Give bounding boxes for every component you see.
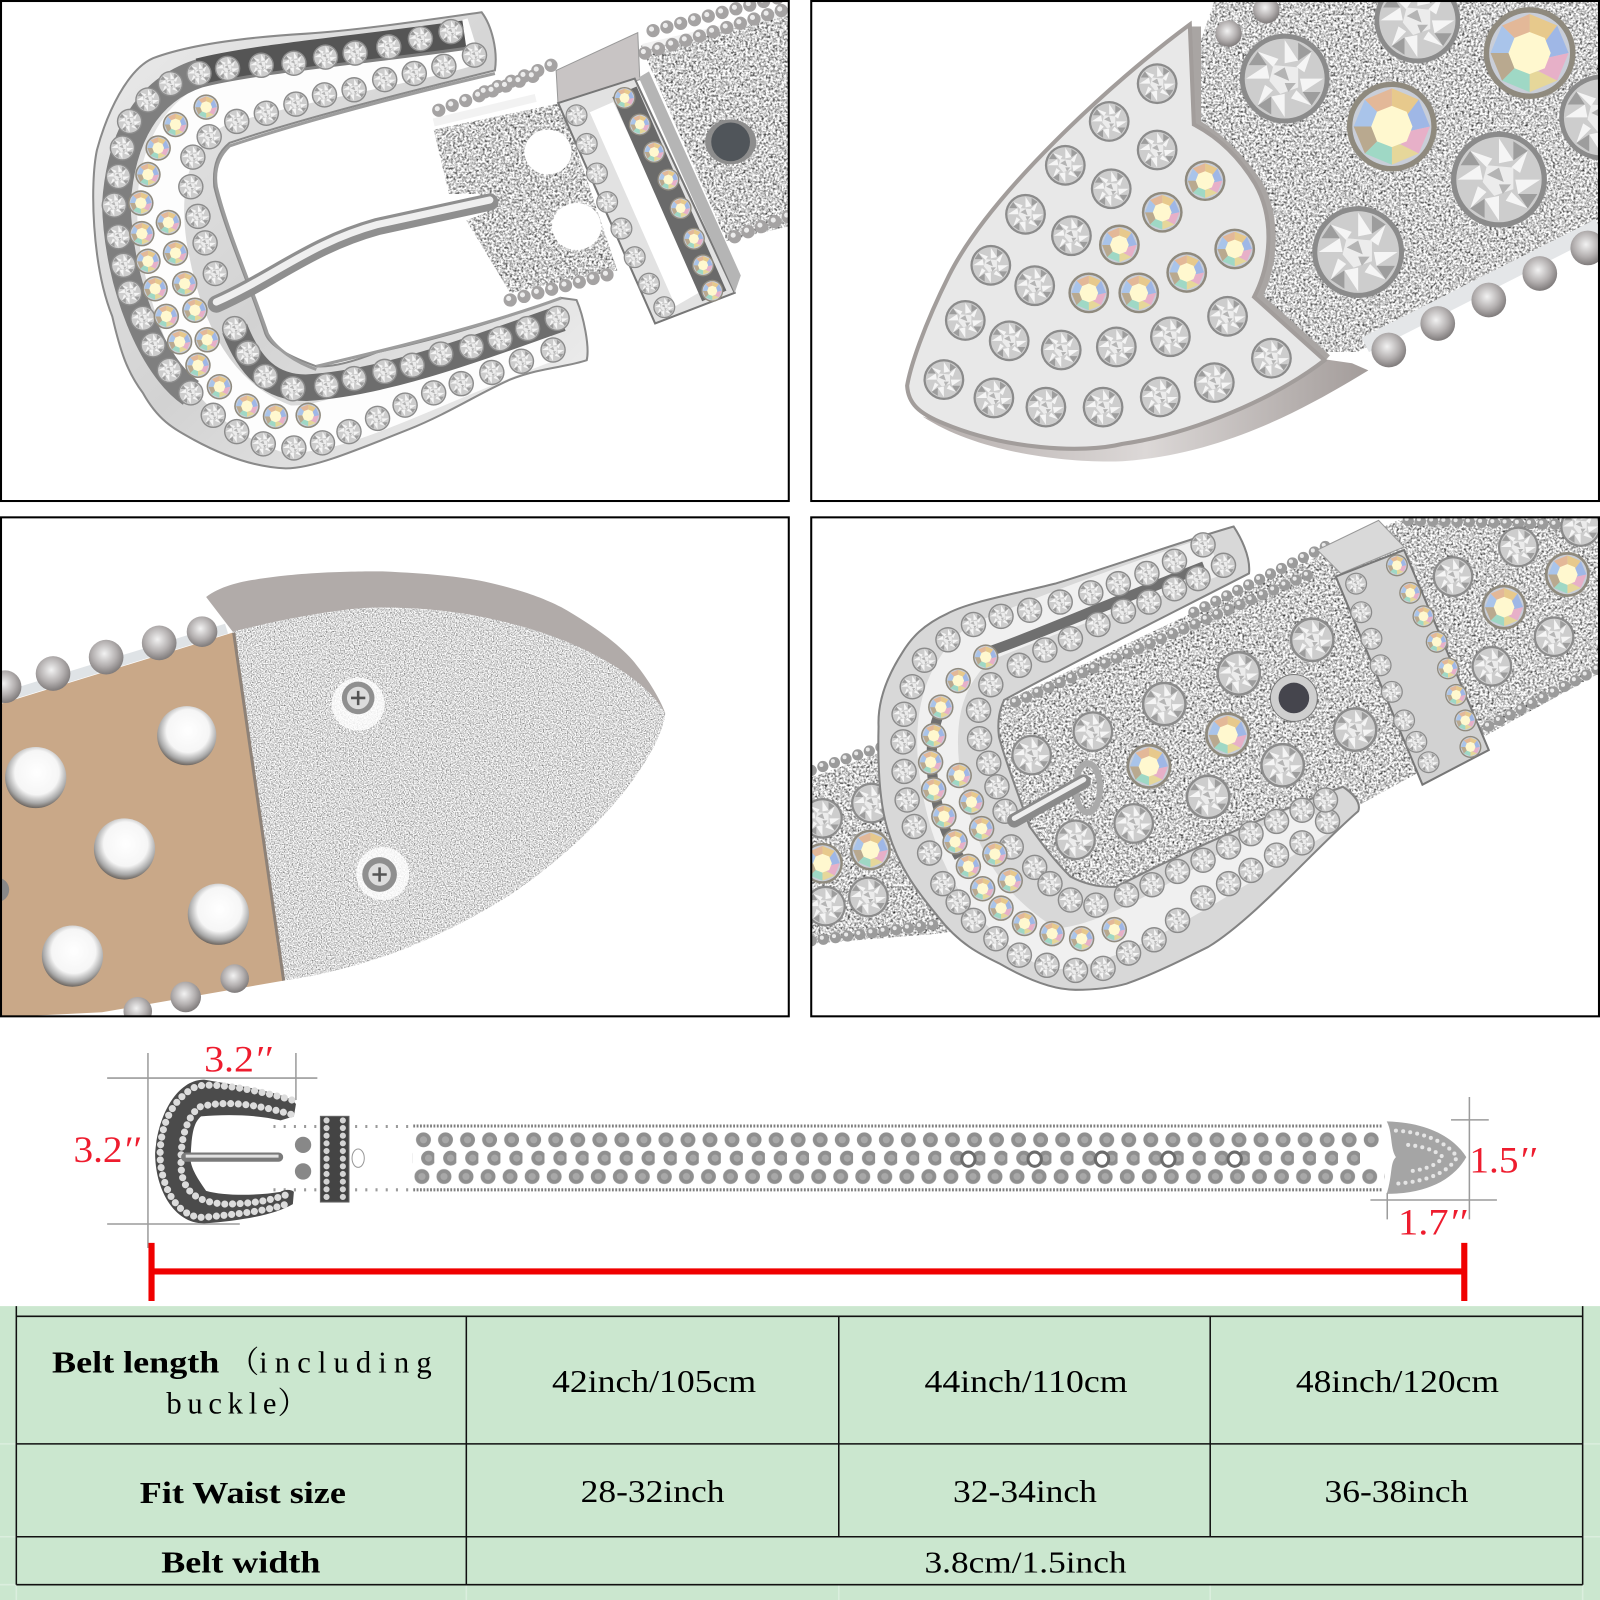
size table xyxy=(0,1306,1600,1600)
row header: belt length: （ xyxy=(229,1345,259,1379)
rhinestones: clear rows xyxy=(102,19,570,461)
strap edge beads xyxy=(1215,0,1600,367)
panel: belt tip back xyxy=(0,571,665,1026)
mini buckle xyxy=(155,1080,311,1223)
panel: belt tip front xyxy=(907,0,1600,461)
screw halos xyxy=(332,678,409,900)
row: waist values: 32-34inch xyxy=(953,1474,1097,1509)
buckle inner polished band xyxy=(161,41,551,429)
panel frames xyxy=(1,1,1599,1016)
large strap stones xyxy=(1240,0,1600,298)
leather white edge xyxy=(0,629,227,698)
snap stud xyxy=(1270,674,1317,721)
row: belt length values: 48inch/120cm xyxy=(1296,1364,1499,1399)
row: belt length values: 44inch/110cm xyxy=(924,1364,1128,1399)
panel: buckled belt xyxy=(802,506,1600,990)
row header: belt length: Belt length xyxy=(52,1345,219,1379)
row header: belt length: including xyxy=(259,1345,432,1379)
tip face xyxy=(907,24,1324,449)
tip rhinestones xyxy=(923,63,1292,428)
dimension guide lines xyxy=(107,1053,1497,1248)
dimension label: buckle width: 3.2′′ xyxy=(204,1038,272,1079)
edge beads xyxy=(0,616,249,1026)
panel: buckle close-up xyxy=(93,0,789,468)
buckle frame xyxy=(93,12,588,468)
belt size diagram xyxy=(73,1038,1537,1301)
rhinestones: iridescent rows xyxy=(128,94,321,429)
row: belt width value: 3.8cm/1.5inch xyxy=(924,1545,1127,1579)
buckle frame xyxy=(878,527,1359,990)
bead chains xyxy=(810,519,1599,941)
rivets xyxy=(0,706,249,987)
mini belt adjustment holes xyxy=(962,1152,1241,1166)
mini keeper xyxy=(320,1116,364,1202)
tip rim against strap xyxy=(1196,27,1327,359)
bead chains xyxy=(437,0,789,300)
row: waist values: 28-32inch xyxy=(581,1474,725,1509)
buckle window rim xyxy=(216,73,561,369)
keeper loop xyxy=(1317,520,1489,785)
tip left edge xyxy=(234,633,284,981)
buckle clear rhinestone rows xyxy=(890,532,1340,983)
strap stones xyxy=(802,506,1600,927)
belt glitter sections xyxy=(434,8,789,293)
dimension label: tip width: 1.7′′ xyxy=(1398,1202,1467,1243)
row: belt length values xyxy=(552,1364,1499,1399)
row header: belt length: buckle xyxy=(166,1386,277,1420)
row: waist values: 36-38inch xyxy=(1324,1474,1469,1509)
buckle prong xyxy=(1014,763,1100,820)
tan leather back xyxy=(0,633,284,1017)
row header: belt length: ） xyxy=(278,1386,308,1420)
mini belt body xyxy=(273,1126,1387,1190)
tip side band xyxy=(922,359,1368,461)
strap white edge xyxy=(1365,227,1599,345)
tip side band xyxy=(206,571,665,713)
row header: fit waist size: Fit Waist size xyxy=(140,1476,346,1510)
glitter belt xyxy=(811,517,1599,944)
buckle dark channels xyxy=(116,36,464,393)
buckle iridescent stones xyxy=(918,644,1127,952)
row: belt length values: 42inch/105cm xyxy=(552,1364,757,1399)
dimension label: buckle height: 3.2′′ xyxy=(73,1129,141,1170)
buckle polished channels xyxy=(938,556,1316,949)
glitter belt strap xyxy=(1194,1,1599,352)
mini tip xyxy=(1387,1121,1466,1194)
row header: belt length xyxy=(52,1345,432,1420)
red length bracket xyxy=(151,1243,1464,1301)
dimension label: tip height: 1.5′′ xyxy=(1469,1139,1537,1180)
screws xyxy=(342,682,397,892)
row header: belt width: Belt width xyxy=(161,1545,320,1579)
tip metal face xyxy=(233,608,665,981)
row: waist values xyxy=(581,1474,1469,1509)
keeper loop xyxy=(556,33,741,323)
buckle prong xyxy=(216,200,490,304)
